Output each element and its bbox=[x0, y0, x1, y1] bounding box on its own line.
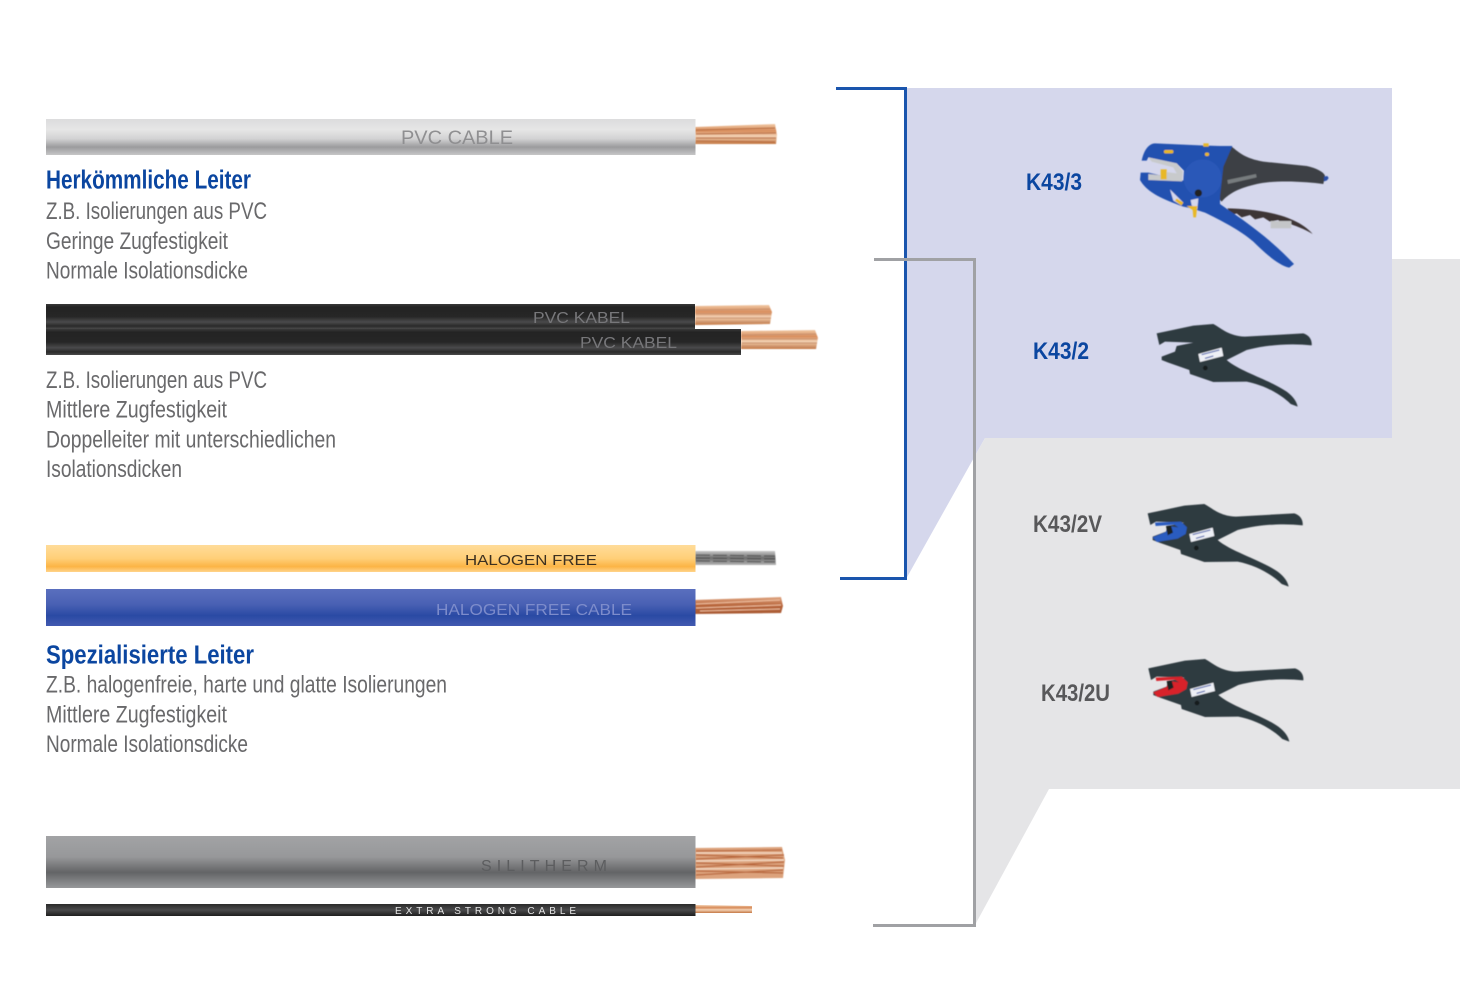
label: K43/3: K43/3 bbox=[1026, 169, 1082, 196]
cable: PVC cable: PVC CABLE bbox=[401, 128, 513, 149]
cable: double PVC cable: PVC KABEL bbox=[533, 310, 630, 327]
text block: double conductors: Doppelleiter mit unterschiedlichen bbox=[46, 426, 336, 454]
text block: double conductors: Mittlere Zugfestigkeit bbox=[46, 396, 227, 424]
text block: special conductors: Z.B. halogenfreie, harte und glatte Isolierungen bbox=[46, 672, 447, 698]
cable: extra strong: EXTRA STRONG CABLE bbox=[395, 906, 576, 917]
cable: halogen free blue bbox=[46, 589, 783, 626]
cable: halogen free yellow: HALOGEN FREE bbox=[465, 552, 597, 569]
label: K43/2V: K43/2V bbox=[1033, 511, 1102, 538]
icon: K43/2U pliers bbox=[1148, 659, 1303, 742]
text block: conventional conductors: Z.B. Isolierungen aus PVC bbox=[46, 198, 267, 225]
icon: K43/2 pliers bbox=[1157, 324, 1312, 407]
cable: halogen free yellow bbox=[46, 545, 776, 572]
panel: lavender tool zone bbox=[906, 88, 1392, 579]
text block: special conductors bbox=[46, 672, 447, 758]
cable: PVC cable bbox=[46, 119, 777, 155]
cable: halogen free blue: HALOGEN FREE CABLE bbox=[436, 602, 632, 619]
text block: special conductors: Normale Isolationsdicke bbox=[46, 731, 248, 758]
text block: special conductors: Mittlere Zugfestigkeit bbox=[46, 702, 227, 728]
text block: conventional conductors bbox=[46, 198, 267, 284]
panel: grey tool zone bbox=[975, 259, 1460, 925]
bracket: grey bbox=[873, 260, 974, 926]
label: K43/2U: K43/2U bbox=[1041, 680, 1110, 707]
text block: conventional conductors: Geringe Zugfestigkeit bbox=[46, 228, 228, 255]
text block: double conductors bbox=[46, 367, 336, 483]
heading: Herkömmliche Leiter: Herkömmliche Leiter bbox=[46, 166, 251, 194]
label: K43/2: K43/2 bbox=[1033, 338, 1089, 365]
cable: double PVC cable: PVC KABEL bbox=[580, 335, 677, 352]
icon: K43/2V pliers bbox=[1148, 504, 1303, 587]
cable: double PVC cable bbox=[46, 304, 818, 355]
cable: Silitherm: SILITHERM bbox=[481, 858, 607, 875]
text block: double conductors: Z.B. Isolierungen aus PVC bbox=[46, 367, 267, 394]
bracket: blue bbox=[836, 88, 906, 578]
text block: conventional conductors: Normale Isolationsdicke bbox=[46, 258, 248, 284]
icon: K43/3 blue pliers bbox=[1140, 143, 1329, 268]
heading: Spezialisierte Leiter: Spezialisierte Leiter bbox=[46, 642, 254, 670]
text block: double conductors: Isolationsdicken bbox=[46, 456, 182, 483]
cable: Silitherm bbox=[46, 836, 785, 888]
cable: extra strong bbox=[46, 904, 752, 917]
